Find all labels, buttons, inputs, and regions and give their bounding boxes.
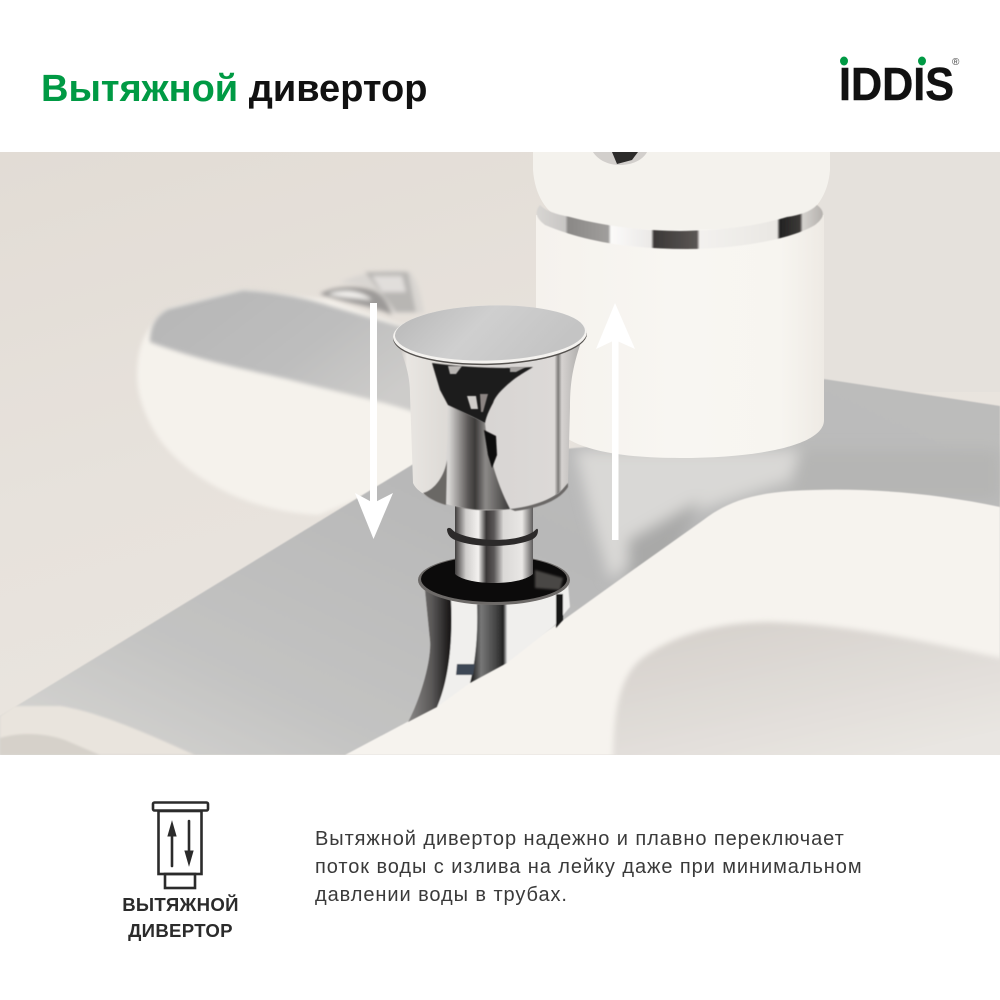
knob black patch xyxy=(484,430,497,468)
wall background xyxy=(0,152,1000,755)
chrome lever base at top xyxy=(593,152,647,165)
knob highlights in dark area xyxy=(448,366,526,412)
socket hole xyxy=(418,555,570,605)
left white body with chrome top xyxy=(137,290,430,515)
icon label: ДИВЕРТОР xyxy=(128,920,233,941)
chrome reflections under cylinder xyxy=(575,450,1000,590)
description text: Вытяжной дивертор надежно и плавно переключает xyxy=(315,828,845,850)
stem groove xyxy=(447,528,538,546)
knob upper dark reflection xyxy=(432,363,533,423)
diverter knob xyxy=(392,303,588,511)
white basin xyxy=(345,490,1000,755)
basin bowl xyxy=(613,622,1000,770)
chrome ring xyxy=(537,205,823,249)
knob top face xyxy=(392,303,588,368)
description text: давлении воды в трубах. xyxy=(315,884,568,906)
bottom reflection of diverter xyxy=(408,583,570,722)
chrome main plate xyxy=(0,379,1000,755)
left body chrome top xyxy=(150,290,430,418)
knob middle reflection xyxy=(423,405,510,510)
stem xyxy=(447,505,538,583)
title: Вытяжной дивертор xyxy=(41,68,427,110)
rear lever xyxy=(320,271,424,315)
description text: поток воды с излива на лейку даже при минимальном xyxy=(315,856,863,878)
photo: pull-out diverter on chrome faucet body xyxy=(0,152,1000,755)
arrow: down xyxy=(355,303,393,539)
arrow: up xyxy=(596,303,635,540)
description text xyxy=(315,828,863,906)
logo: IDDIS: ® xyxy=(952,57,960,68)
lower left white edge xyxy=(0,706,195,755)
icon: pull-out diverter xyxy=(152,801,210,890)
icon label xyxy=(122,894,239,941)
upper white cylinder with chrome ring xyxy=(533,152,830,458)
logo: IDDIS: IDDIS xyxy=(839,58,954,110)
icon label: ВЫТЯЖНОЙ xyxy=(122,894,239,915)
knob lower-left dark xyxy=(423,460,447,505)
